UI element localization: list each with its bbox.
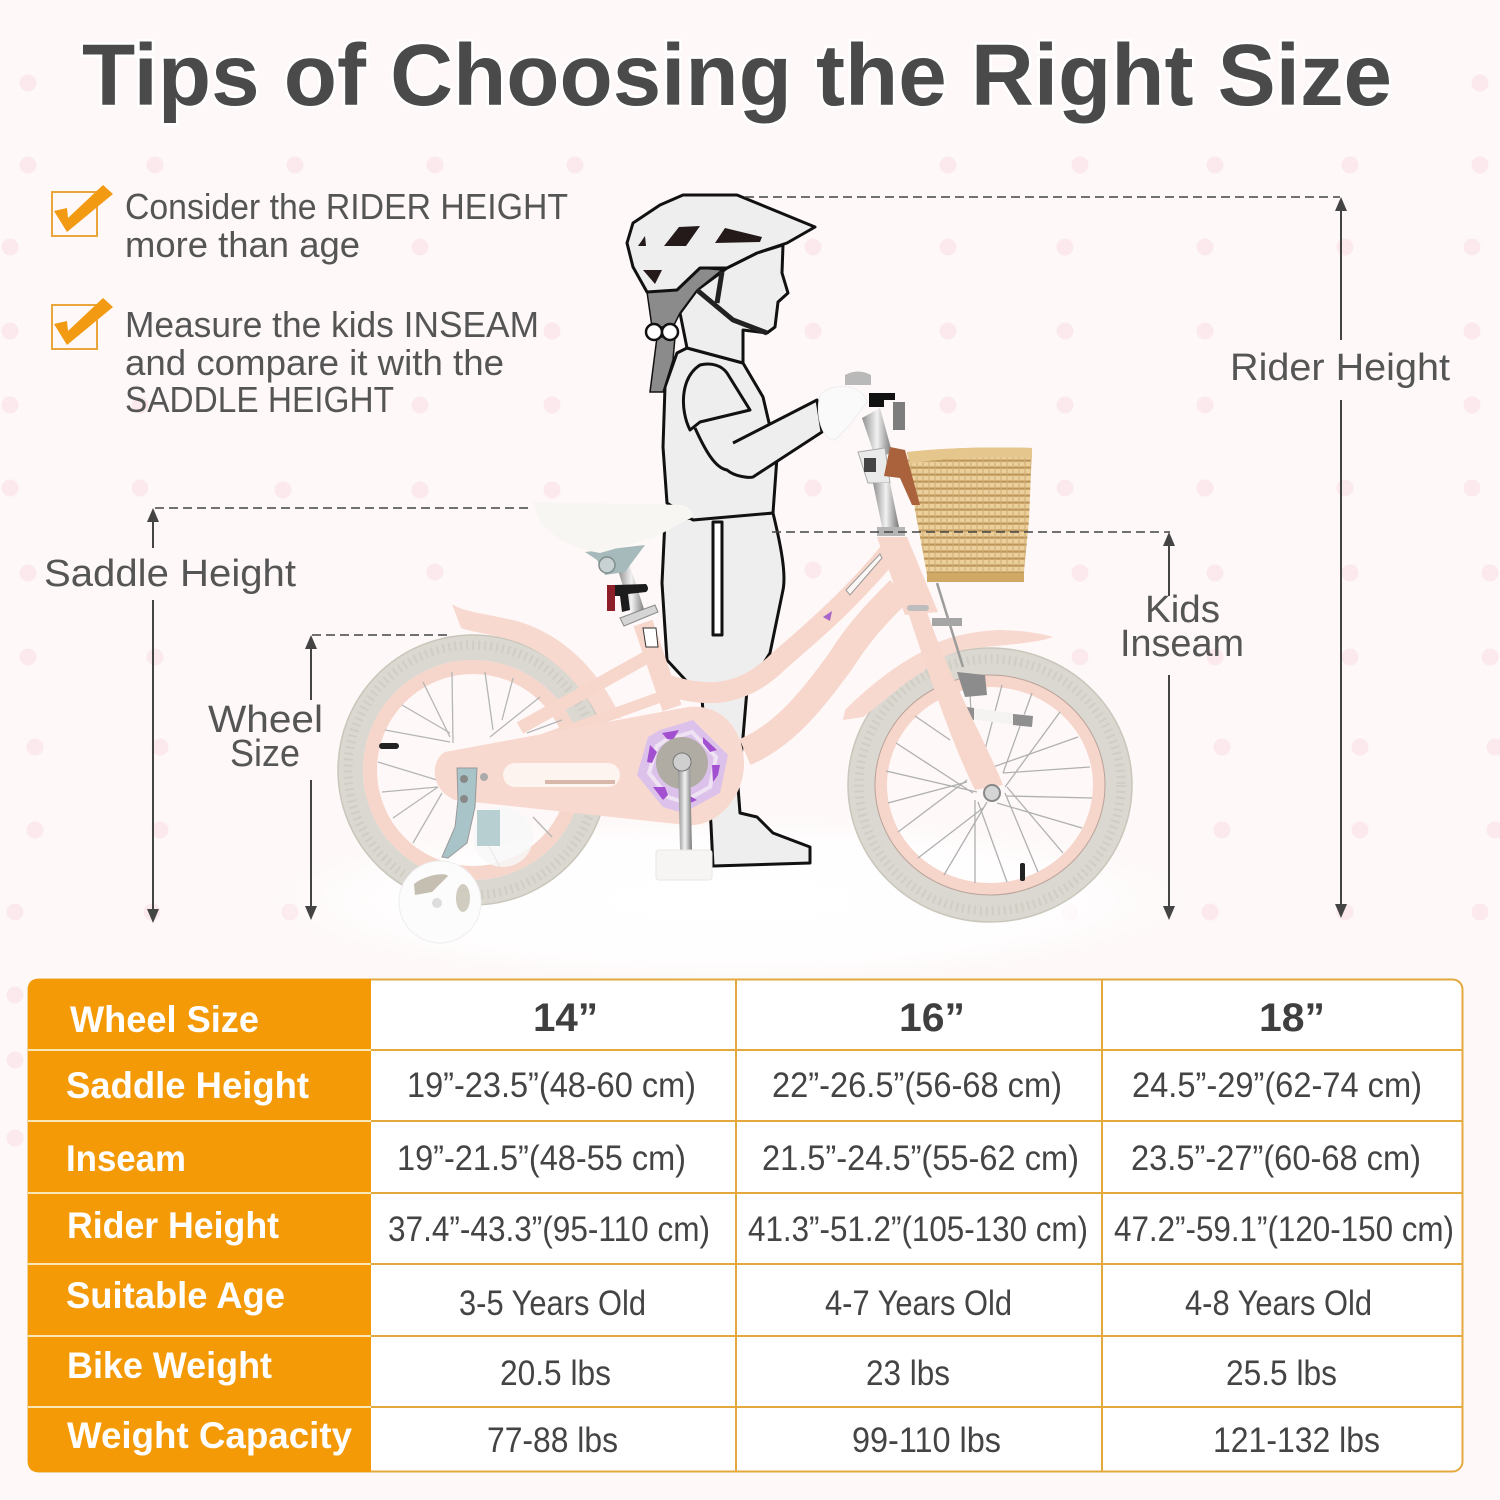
orange label column xyxy=(28,979,371,1472)
tip 2: SADDLE HEIGHT xyxy=(125,379,394,420)
frame label and emblem xyxy=(643,554,882,647)
wheel size row: 16” xyxy=(899,996,965,1040)
front fender xyxy=(843,630,1053,720)
inseam row: 23.5”-27”(60-68 cm) xyxy=(1131,1139,1421,1178)
row labels: Bike Weight xyxy=(67,1345,272,1386)
torso xyxy=(663,348,777,520)
row labels: Weight Capacity xyxy=(67,1415,352,1456)
measurement: rider height: Rider Height xyxy=(1230,347,1450,389)
size table xyxy=(28,979,1463,1472)
measurement: kids inseam: Inseam xyxy=(1120,623,1244,665)
rider height row: 47.2”-59.1”(120-150 cm) xyxy=(1114,1210,1454,1249)
measurement: wheel size xyxy=(208,635,450,920)
suitable age row: 4-7 Years Old xyxy=(825,1284,1012,1323)
seat post xyxy=(585,545,658,626)
tip 2 xyxy=(52,298,539,420)
ground glow xyxy=(260,815,1200,985)
background polka dots xyxy=(2,74,1500,1146)
tip 2: and compare it with the xyxy=(125,342,504,383)
head and neck xyxy=(680,245,788,363)
icon: checkbox 2 xyxy=(52,298,113,349)
measurement: kids inseam xyxy=(772,532,1244,920)
wheel size row: 18” xyxy=(1259,996,1325,1040)
measurement: kids inseam: Kids xyxy=(1145,589,1220,631)
rider height row xyxy=(388,1210,1454,1249)
measurement: wheel size: Wheel xyxy=(208,699,323,741)
chain guard xyxy=(435,707,744,850)
rear wheel xyxy=(338,635,608,905)
suitable age row: 4-8 Years Old xyxy=(1185,1284,1372,1323)
trouser stripe xyxy=(713,522,722,635)
saddle height row: 19”-23.5”(48-60 cm) xyxy=(407,1066,696,1105)
weight capacity row: 99-110 lbs xyxy=(852,1421,1001,1460)
suitable age row: 3-5 Years Old xyxy=(459,1284,646,1323)
rear fender xyxy=(452,604,621,722)
inseam row: 19”-21.5”(48-55 cm) xyxy=(397,1139,686,1178)
front wheel xyxy=(848,648,1132,922)
bike weight row: 25.5 lbs xyxy=(1226,1354,1337,1393)
tip 1 xyxy=(52,185,568,265)
head tube and fork xyxy=(877,537,1003,801)
row labels: Inseam xyxy=(66,1138,186,1179)
rider height row: 41.3”-51.2”(105-130 cm) xyxy=(748,1210,1088,1249)
wheel size row xyxy=(533,996,1325,1040)
chainring emblem xyxy=(637,720,728,813)
row labels: Wheel Size xyxy=(70,999,259,1040)
tip 1: more than age xyxy=(125,224,360,265)
bike weight row xyxy=(500,1354,1337,1393)
title: Tips of Choosing the Right Size xyxy=(82,27,1392,124)
saddle height row: 24.5”-29”(62-74 cm) xyxy=(1132,1066,1422,1105)
row labels xyxy=(66,999,352,1456)
front reflector xyxy=(960,706,1033,727)
bike weight row: 20.5 lbs xyxy=(500,1354,611,1393)
crank arm xyxy=(673,753,692,850)
training wheel bracket xyxy=(442,768,533,867)
row labels: Saddle Height xyxy=(66,1065,309,1106)
leg xyxy=(662,513,810,866)
handlebar and stem xyxy=(818,372,905,536)
weight capacity row: 77-88 lbs xyxy=(487,1421,618,1460)
sleeve xyxy=(683,364,750,430)
measurement: saddle height xyxy=(44,508,533,923)
helmet xyxy=(627,195,815,292)
child outline figure xyxy=(662,245,822,866)
suitable age row xyxy=(459,1284,1372,1323)
grid lines xyxy=(371,979,1463,1472)
row labels: Suitable Age xyxy=(66,1275,285,1316)
helmet strap xyxy=(646,268,767,392)
measurement: saddle height: Saddle Height xyxy=(44,553,296,595)
inseam row: 21.5”-24.5”(55-62 cm) xyxy=(762,1139,1079,1178)
tip 2: Measure the kids INSEAM xyxy=(125,304,539,345)
measurement: wheel size: Size xyxy=(230,733,300,775)
rider height row: 37.4”-43.3”(95-110 cm) xyxy=(388,1210,710,1249)
wheel size row: 14” xyxy=(533,996,598,1040)
label column dividers xyxy=(28,1050,371,1407)
icon: checkbox 1 xyxy=(52,185,113,236)
bike weight row: 23 lbs xyxy=(866,1354,950,1393)
saddle height row: 22”-26.5”(56-68 cm) xyxy=(772,1066,1062,1105)
training wheel xyxy=(399,861,481,943)
weight capacity row: 121-132 lbs xyxy=(1213,1421,1380,1460)
bike frame xyxy=(480,548,900,762)
measurement: rider height xyxy=(745,197,1450,918)
weight capacity row xyxy=(487,1421,1380,1460)
wicker basket xyxy=(884,447,1032,582)
saddle xyxy=(533,502,693,553)
row labels: Rider Height xyxy=(67,1205,279,1246)
pedal xyxy=(656,850,712,880)
tip 1: Consider the RIDER HEIGHT xyxy=(125,186,568,227)
arm xyxy=(695,400,822,477)
inseam row xyxy=(397,1139,1421,1178)
saddle height row xyxy=(407,1066,1422,1105)
